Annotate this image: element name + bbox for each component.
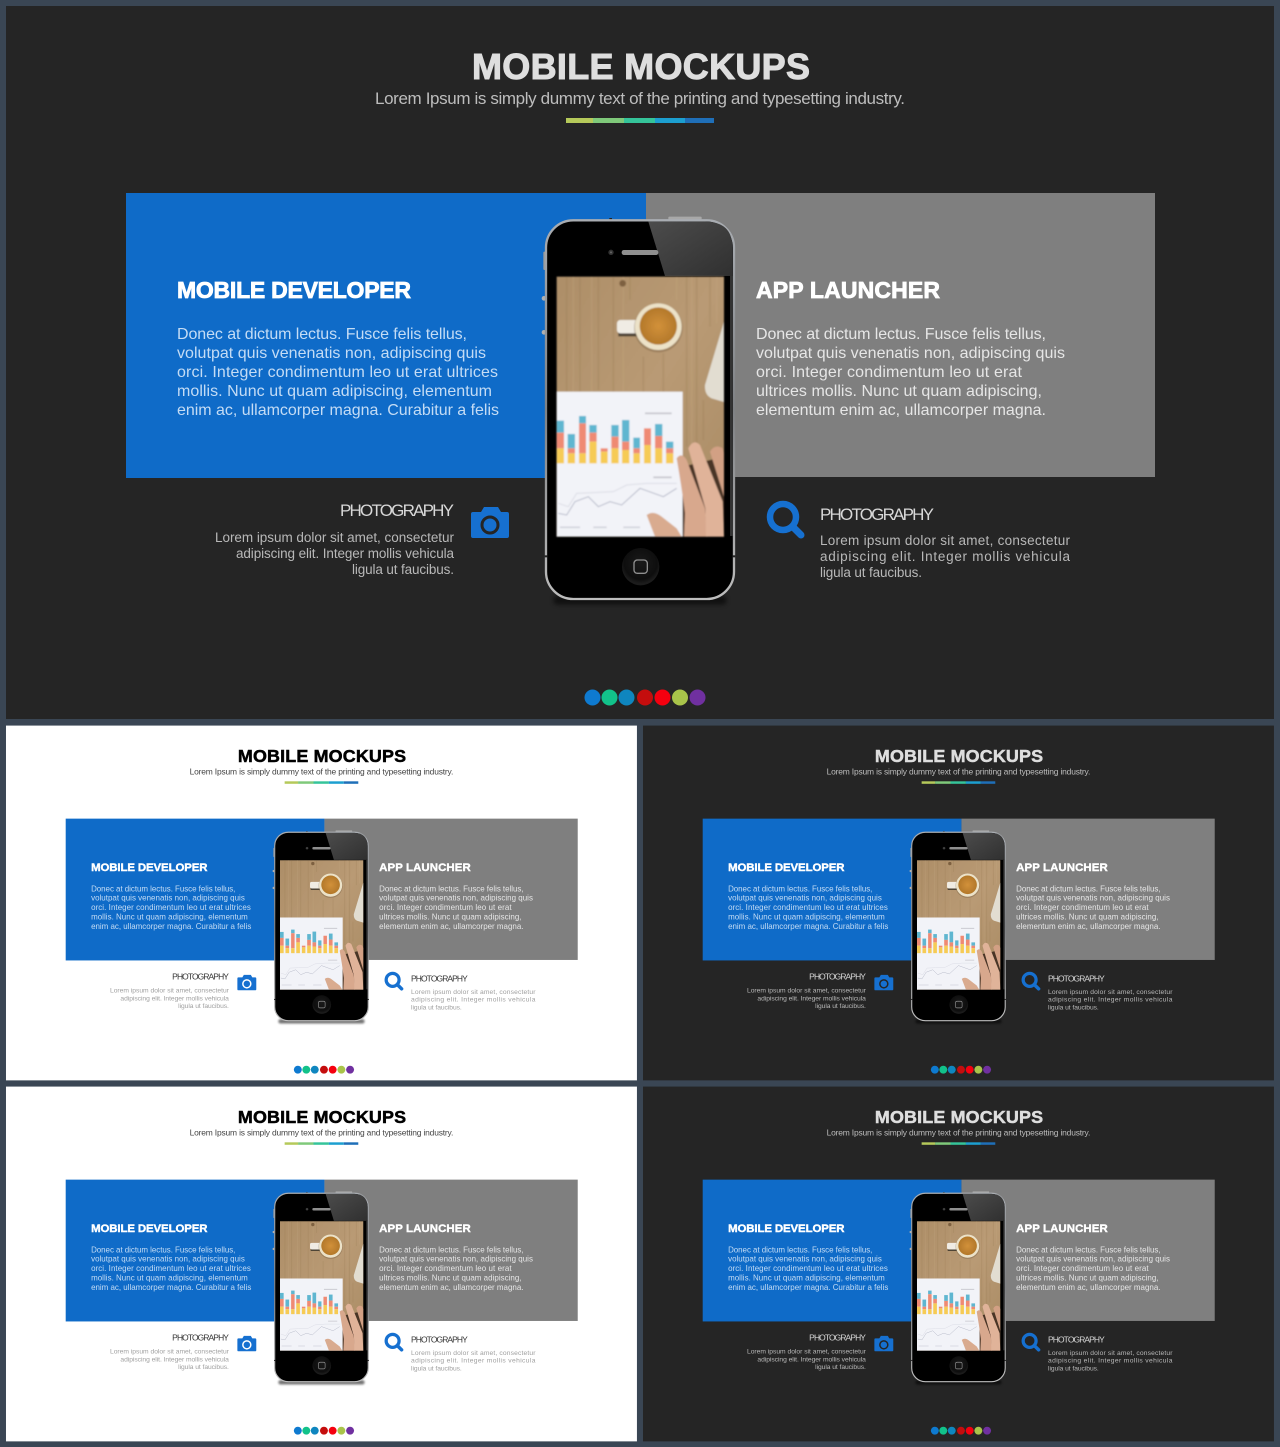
pagination dots: [294, 1427, 354, 1435]
feature right heading: PHOTOGRAPHY: [1048, 1334, 1105, 1344]
pagination dots: [931, 1427, 991, 1435]
icon: camera: [874, 975, 893, 990]
text block: mobile developer: Donec at dictum lectus. Fusce felis tellus,: [91, 1245, 235, 1254]
text block: app launcher: elementum enim ac, ullamcorper magna.: [379, 1283, 523, 1292]
feature right text: adipiscing elit. Integer mollis vehicula: [820, 549, 1070, 564]
text block: mobile developer: enim ac, ullamcorper magna. Curabitur a felis: [728, 1283, 888, 1292]
text block: mobile developer: Donec at dictum lectus. Fusce felis tellus,: [728, 1245, 872, 1254]
text block: mobile developer: Donec at dictum lectus. Fusce felis tellus,: [177, 326, 467, 343]
text block: mobile developer: volutpat quis venenatis non, adipiscing quis: [91, 1255, 245, 1264]
subtitle: Lorem Ipsum is simply dummy text of the printing and typesetting industry.: [190, 766, 453, 776]
feature left text: Lorem ipsum dolor sit amet, consectetur: [747, 987, 867, 994]
subtitle: Lorem Ipsum is simply dummy text of the printing and typesetting industry.: [827, 1127, 1090, 1137]
text block: mobile developer: [728, 1245, 888, 1292]
phone mockup: [910, 1191, 1006, 1384]
feature right text: ligula ut faucibus.: [411, 1005, 462, 1012]
text block: app launcher: orci. Integer condimentum leo ut erat: [1016, 1264, 1149, 1273]
panel: mobile developer: [66, 1180, 324, 1321]
feature left text: Lorem ipsum dolor sit amet, consectetur: [110, 987, 230, 994]
feature left text: adipiscing elit. Integer mollis vehicula: [236, 546, 454, 561]
heading: mobile developer: MOBILE DEVELOPER: [177, 277, 411, 303]
feature left text: ligula ut faucibus.: [815, 1364, 866, 1371]
text block: app launcher: volutpat quis venenatis non, adipiscing quis: [1016, 1255, 1170, 1264]
text block: mobile developer: mollis. Nunc ut quam adipiscing, elementum: [728, 1274, 885, 1283]
feature left heading: PHOTOGRAPHY: [340, 501, 454, 520]
text block: mobile developer: volutpat quis venenatis non, adipiscing quis: [177, 345, 486, 362]
feature left text: ligula ut faucibus.: [352, 562, 454, 577]
feature right text: [1048, 989, 1173, 1012]
feature left heading: PHOTOGRAPHY: [809, 1332, 866, 1342]
text block: app launcher: ultrices mollis. Nunc ut quam adipiscing,: [379, 1274, 521, 1283]
subtitle: Lorem Ipsum is simply dummy text of the printing and typesetting industry.: [827, 766, 1090, 776]
text block: app launcher: volutpat quis venenatis non, adipiscing quis: [379, 894, 533, 903]
text block: mobile developer: [177, 326, 499, 419]
text block: mobile developer: enim ac, ullamcorper magna. Curabitur a felis: [91, 922, 251, 931]
feature right text: adipiscing elit. Integer mollis vehicula: [411, 1358, 536, 1365]
title: MOBILE MOCKUPS: [875, 1107, 1043, 1127]
text block: mobile developer: mollis. Nunc ut quam adipiscing, elementum: [728, 913, 885, 922]
feature right text: ligula ut faucibus.: [820, 565, 922, 580]
text block: mobile developer: mollis. Nunc ut quam adipiscing, elementum: [177, 383, 492, 400]
icon: camera: [237, 975, 256, 990]
text block: app launcher: ultrices mollis. Nunc ut quam adipiscing,: [756, 383, 1042, 400]
feature left heading: PHOTOGRAPHY: [172, 1332, 229, 1342]
text block: app launcher: orci. Integer condimentum leo ut erat: [379, 903, 512, 912]
feature left text: adipiscing elit. Integer mollis vehicula: [120, 995, 229, 1002]
feature right text: [411, 1350, 536, 1373]
text block: mobile developer: orci. Integer condimentum leo ut erat ultrices: [177, 364, 498, 381]
text block: mobile developer: orci. Integer condimentum leo ut erat ultrices: [728, 1264, 888, 1273]
feature left heading: PHOTOGRAPHY: [809, 971, 866, 981]
text block: app launcher: Donec at dictum lectus. Fusce felis tellus,: [379, 884, 523, 893]
text block: mobile developer: orci. Integer condimentum leo ut erat ultrices: [91, 1264, 251, 1273]
icon: magnifier: [386, 973, 402, 989]
feature right text: Lorem ipsum dolor sit amet, consectetur: [411, 989, 536, 996]
text block: app launcher: orci. Integer condimentum leo ut erat: [1016, 903, 1149, 912]
text block: mobile developer: volutpat quis venenatis non, adipiscing quis: [91, 894, 245, 903]
text block: mobile developer: [91, 1245, 251, 1292]
slide: small white top-left: [6, 726, 637, 1080]
heading: mobile developer: MOBILE DEVELOPER: [728, 1223, 845, 1235]
icon: camera: [237, 1336, 256, 1351]
panel: mobile developer: [703, 819, 961, 960]
text block: app launcher: Donec at dictum lectus. Fusce felis tellus,: [1016, 1245, 1160, 1254]
heading: mobile developer: MOBILE DEVELOPER: [728, 862, 845, 874]
text block: mobile developer: mollis. Nunc ut quam adipiscing, elementum: [91, 913, 248, 922]
text block: app launcher: [756, 326, 1065, 419]
icon: magnifier: [770, 504, 801, 535]
panel: app launcher: [961, 819, 1215, 960]
text block: app launcher: [379, 884, 533, 931]
feature left text: [110, 987, 230, 1010]
panel: app launcher: [324, 819, 578, 960]
feature left text: [215, 530, 454, 577]
panel: mobile developer: [66, 819, 324, 960]
title underline: [922, 781, 995, 784]
feature right text: ligula ut faucibus.: [1048, 1366, 1099, 1373]
subtitle: Lorem Ipsum is simply dummy text of the printing and typesetting industry.: [375, 89, 905, 108]
feature left text: adipiscing elit. Integer mollis vehicula: [757, 995, 866, 1002]
slide: small dark bottom-right: [643, 1087, 1274, 1441]
text block: app launcher: Donec at dictum lectus. Fusce felis tellus,: [379, 1245, 523, 1254]
pagination dots: [294, 1066, 354, 1074]
feature right text: adipiscing elit. Integer mollis vehicula: [411, 997, 536, 1004]
text block: mobile developer: enim ac, ullamcorper magna. Curabitur a felis: [91, 1283, 251, 1292]
feature right text: [820, 533, 1070, 580]
text block: app launcher: volutpat quis venenatis non, adipiscing quis: [379, 1255, 533, 1264]
panel: app launcher: [646, 193, 1155, 477]
title underline: [285, 1142, 358, 1145]
feature left text: adipiscing elit. Integer mollis vehicula: [757, 1356, 866, 1363]
text block: mobile developer: enim ac, ullamcorper magna. Curabitur a felis: [728, 922, 888, 931]
text block: mobile developer: Donec at dictum lectus. Fusce felis tellus,: [728, 884, 872, 893]
feature left text: adipiscing elit. Integer mollis vehicula: [120, 1356, 229, 1363]
phone mockup: [542, 217, 735, 605]
heading: mobile developer: MOBILE DEVELOPER: [91, 862, 208, 874]
heading: app launcher: APP LAUNCHER: [1016, 862, 1108, 874]
text block: mobile developer: mollis. Nunc ut quam adipiscing, elementum: [91, 1274, 248, 1283]
panel: app launcher: [324, 1180, 578, 1321]
title: MOBILE MOCKUPS: [238, 1107, 406, 1127]
feature right text: [1048, 1350, 1173, 1373]
text block: app launcher: ultrices mollis. Nunc ut quam adipiscing,: [1016, 1274, 1158, 1283]
title: MOBILE MOCKUPS: [875, 746, 1043, 766]
feature right text: Lorem ipsum dolor sit amet, consectetur: [411, 1350, 536, 1357]
feature left text: Lorem ipsum dolor sit amet, consectetur: [110, 1348, 230, 1355]
panel: mobile developer: [126, 193, 646, 478]
text block: app launcher: ultrices mollis. Nunc ut quam adipiscing,: [1016, 913, 1158, 922]
icon: camera: [471, 507, 509, 538]
feature right text: ligula ut faucibus.: [411, 1366, 462, 1373]
phone mockup: [273, 1191, 369, 1384]
feature right text: Lorem ipsum dolor sit amet, consectetur: [1048, 1350, 1173, 1357]
title underline: [922, 1142, 995, 1145]
panel: app launcher: [961, 1180, 1215, 1321]
feature right text: adipiscing elit. Integer mollis vehicula: [1048, 1358, 1173, 1365]
title underline: [566, 118, 714, 123]
text block: app launcher: elementum enim ac, ullamcorper magna.: [756, 402, 1046, 419]
heading: app launcher: APP LAUNCHER: [379, 1223, 471, 1235]
title: MOBILE MOCKUPS: [472, 46, 810, 87]
phone mockup: [910, 830, 1006, 1023]
icon: magnifier: [386, 1334, 402, 1350]
text block: app launcher: ultrices mollis. Nunc ut quam adipiscing,: [379, 913, 521, 922]
text block: app launcher: Donec at dictum lectus. Fusce felis tellus,: [756, 326, 1046, 343]
slide: large dark mockup: [6, 6, 1274, 719]
text block: app launcher: orci. Integer condimentum leo ut erat: [379, 1264, 512, 1273]
heading: app launcher: APP LAUNCHER: [379, 862, 471, 874]
text block: mobile developer: volutpat quis venenatis non, adipiscing quis: [728, 894, 882, 903]
text block: mobile developer: orci. Integer condimentum leo ut erat ultrices: [728, 903, 888, 912]
text block: mobile developer: enim ac, ullamcorper magna. Curabitur a felis: [177, 402, 499, 419]
text block: mobile developer: Donec at dictum lectus. Fusce felis tellus,: [91, 884, 235, 893]
text block: app launcher: elementum enim ac, ullamcorper magna.: [1016, 922, 1160, 931]
text block: app launcher: orci. Integer condimentum leo ut erat: [756, 364, 1023, 381]
feature left text: Lorem ipsum dolor sit amet, consectetur: [747, 1348, 867, 1355]
feature left text: [747, 1348, 867, 1371]
feature left text: ligula ut faucibus.: [815, 1003, 866, 1010]
text block: app launcher: [1016, 884, 1170, 931]
feature left text: [110, 1348, 230, 1371]
icon: camera: [874, 1336, 893, 1351]
panel: mobile developer: [703, 1180, 961, 1321]
text block: mobile developer: [728, 884, 888, 931]
feature left text: [747, 987, 867, 1010]
icon: magnifier: [1023, 1334, 1039, 1350]
feature left text: Lorem ipsum dolor sit amet, consectetur: [215, 530, 454, 545]
text block: app launcher: volutpat quis venenatis non, adipiscing quis: [756, 345, 1065, 362]
feature right heading: PHOTOGRAPHY: [1048, 973, 1105, 983]
text block: app launcher: [379, 1245, 533, 1292]
subtitle: Lorem Ipsum is simply dummy text of the printing and typesetting industry.: [190, 1127, 453, 1137]
title underline: [285, 781, 358, 784]
pagination dots: [584, 690, 706, 706]
text block: mobile developer: volutpat quis venenatis non, adipiscing quis: [728, 1255, 882, 1264]
feature left heading: PHOTOGRAPHY: [172, 971, 229, 981]
feature right heading: PHOTOGRAPHY: [820, 505, 934, 524]
feature right text: ligula ut faucibus.: [1048, 1005, 1099, 1012]
text block: app launcher: elementum enim ac, ullamcorper magna.: [379, 922, 523, 931]
feature right text: Lorem ipsum dolor sit amet, consectetur: [1048, 989, 1173, 996]
feature right text: [411, 989, 536, 1012]
feature right text: Lorem ipsum dolor sit amet, consectetur: [820, 533, 1070, 548]
slide: small dark top-right: [643, 726, 1274, 1080]
phone mockup: [273, 830, 369, 1023]
feature left text: ligula ut faucibus.: [178, 1003, 229, 1010]
text block: app launcher: [1016, 1245, 1170, 1292]
heading: app launcher: APP LAUNCHER: [1016, 1223, 1108, 1235]
feature right text: adipiscing elit. Integer mollis vehicula: [1048, 997, 1173, 1004]
text block: mobile developer: orci. Integer condimentum leo ut erat ultrices: [91, 903, 251, 912]
feature right heading: PHOTOGRAPHY: [411, 973, 468, 983]
text block: app launcher: Donec at dictum lectus. Fusce felis tellus,: [1016, 884, 1160, 893]
title: MOBILE MOCKUPS: [238, 746, 406, 766]
heading: app launcher: APP LAUNCHER: [756, 277, 940, 303]
text block: mobile developer: [91, 884, 251, 931]
heading: mobile developer: MOBILE DEVELOPER: [91, 1223, 208, 1235]
text block: app launcher: volutpat quis venenatis non, adipiscing quis: [1016, 894, 1170, 903]
pagination dots: [931, 1066, 991, 1074]
icon: magnifier: [1023, 973, 1039, 989]
slide: small white bottom-left: [6, 1087, 637, 1441]
text block: app launcher: elementum enim ac, ullamcorper magna.: [1016, 1283, 1160, 1292]
feature left text: ligula ut faucibus.: [178, 1364, 229, 1371]
feature right heading: PHOTOGRAPHY: [411, 1334, 468, 1344]
